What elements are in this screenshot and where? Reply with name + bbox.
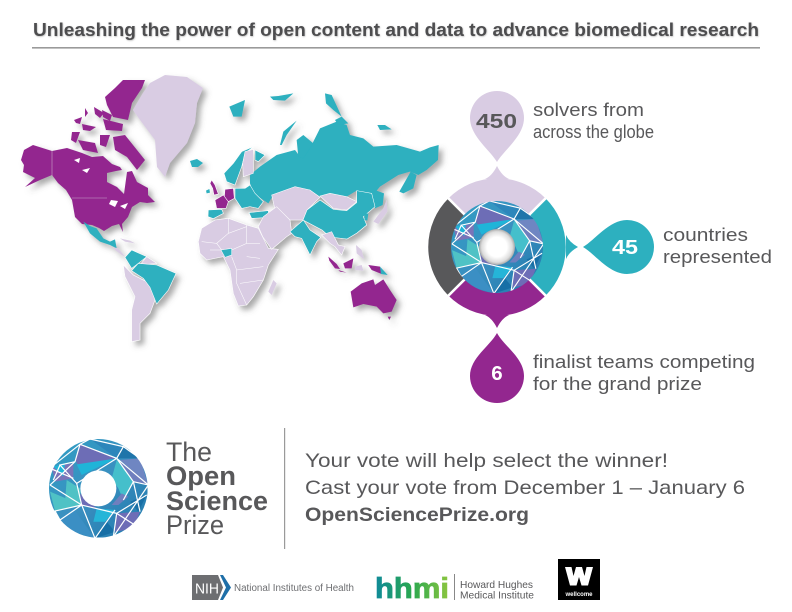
Korea [364, 213, 368, 221]
label: finalists: finalist teams competing [533, 351, 755, 372]
label: countries: countries [663, 224, 748, 245]
map: Southern continents [83, 200, 397, 342]
label: countries: represented [663, 246, 772, 267]
label: solvers: across the globe [533, 121, 654, 142]
Madagascar [268, 280, 277, 295]
Papua New Guinea [380, 267, 388, 275]
Japan [373, 200, 387, 224]
logo: HHMI: Howard Hughes [460, 579, 533, 591]
Philippines [355, 245, 364, 271]
Africa [198, 218, 278, 306]
ring crystal emblem [451, 201, 544, 294]
ring pointer: countries [566, 235, 578, 259]
label: countries [663, 224, 772, 267]
logo: HHMI: Medical Institute [460, 590, 534, 602]
Middle East [258, 207, 292, 249]
map: Greenland [133, 75, 203, 177]
UK, Germany, France [210, 180, 218, 195]
Russia [250, 122, 439, 208]
logo wordmark: Prize [166, 510, 224, 540]
Central America [113, 238, 135, 257]
label: finalists: for the grand prize [533, 373, 702, 394]
title: Unleashing the power of open content and data to advance biomedical research [33, 20, 759, 40]
map: North America [21, 80, 155, 232]
Ireland [206, 189, 210, 193]
ring pointer: solvers [485, 166, 509, 179]
Turkey [249, 211, 269, 218]
pin: 450 solvers: 450 [476, 111, 517, 133]
ring segment: finalists [448, 278, 546, 317]
South America south [123, 265, 155, 342]
ring segment: countries [528, 198, 567, 296]
Central Asia [272, 187, 320, 220]
logo: NIH: NIH [195, 580, 219, 598]
Scandinavia [224, 147, 253, 185]
logo wordmark: Open [166, 461, 236, 491]
label: solvers: solvers from [533, 99, 644, 120]
pin: 45 countries: 45 [612, 237, 638, 259]
Brazil [132, 263, 176, 304]
Spain [208, 209, 223, 219]
map: Iceland [190, 159, 203, 167]
Nigeria [221, 248, 232, 257]
logo: Wellcome [558, 559, 600, 600]
Venezuela and Colombia [125, 250, 147, 268]
pin: 45 countries [583, 220, 654, 274]
India [290, 220, 321, 255]
logo wordmark [166, 437, 268, 540]
SE Asia [322, 232, 345, 255]
pin: 6 finalists: 6 [491, 362, 503, 385]
logo: NIH: National Institutes of Health [234, 583, 354, 594]
ring pointer: finalists [485, 315, 509, 328]
map: Eurasia [206, 93, 439, 239]
logo: Wellcome: wellcome [564, 592, 593, 598]
logo: HHMI: hhmi [375, 573, 449, 605]
call to vote [305, 450, 745, 526]
Mongolia [320, 193, 357, 210]
Indonesia [328, 257, 382, 274]
Australia [351, 279, 397, 320]
ring segment: remainder [427, 198, 466, 296]
logo wordmark: The [166, 437, 212, 467]
call to vote: Your vote will help select the winner! [305, 450, 668, 472]
ring segment: solvers [448, 177, 546, 216]
call to vote: Cast your vote from December 1 – January 6 [305, 477, 745, 499]
China [303, 191, 375, 239]
pin: 6 finalists [470, 333, 524, 403]
logo: HHMI [375, 573, 534, 605]
call to vote: OpenSciencePrize.org [305, 504, 529, 526]
map: Canada and Alaska borders [52, 151, 107, 198]
pin: 450 solvers [470, 91, 524, 162]
logo: NIH [192, 575, 354, 600]
map: Great Lakes [74, 158, 128, 209]
label: solvers [533, 99, 654, 142]
logo emblem [49, 439, 148, 538]
Eastern Europe [235, 185, 263, 208]
Mexico [83, 222, 117, 248]
label: finalists [533, 351, 755, 394]
logo wordmark: Science [166, 486, 268, 516]
stats ring [427, 166, 578, 328]
world map [21, 75, 439, 342]
